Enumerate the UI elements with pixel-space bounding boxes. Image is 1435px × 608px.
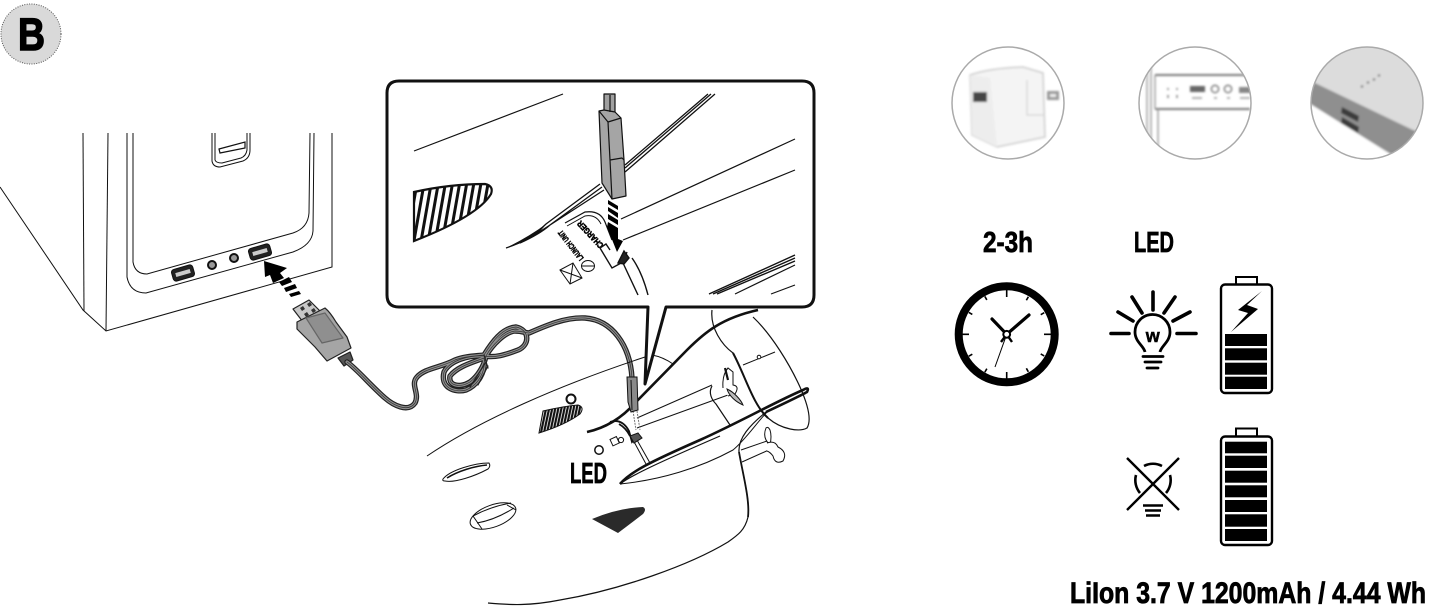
lower motor [741,427,785,462]
USB port right [248,243,272,261]
photo: computer front panel [1145,68,1250,146]
stern loop [712,310,809,430]
label: LED: LED [1134,227,1174,259]
hull charging connector and switch details [610,411,650,464]
arrow: plug into USB port [264,261,301,297]
inset charging port [600,244,648,295]
icon: lit bulb: w [1145,326,1161,346]
jack right [230,254,238,262]
icon: lit bulb [1111,292,1196,368]
cable connector on hull [627,377,638,412]
hull vent with hatch [539,405,582,433]
lower hull vent dark [592,507,645,533]
LED label on hull: LED [570,458,607,490]
step badge B: B [18,9,45,60]
USB port left [171,264,195,282]
inset connector [599,94,626,199]
photo ring power bank [1311,47,1423,159]
inset hatched vent [414,184,492,241]
icon: clock [959,286,1055,382]
step badge B [1,4,61,64]
photo: USB wall adapter [970,67,1059,147]
inset LAUNCH UNIT label: LAUNCH UNIT [556,228,586,262]
inset hull lines [414,94,795,294]
boat hull outline [427,310,809,605]
LED indicator ring [595,446,603,454]
label: 2-3h: 2-3h [983,227,1033,259]
photo: power bank [1312,48,1422,154]
icon: bulb off [1127,458,1179,516]
jack left [208,261,216,269]
inset wedge [506,224,546,248]
computer tower with USB ports [0,133,332,331]
icon: battery full [1221,428,1272,545]
hull top edge thick [587,310,758,432]
icon: battery charging [1221,277,1272,393]
ring above vent [566,394,576,404]
inset CHARGER label: CHARGER [575,219,605,250]
USB charging plug [293,300,353,366]
oval hatch lower [467,497,519,535]
upper motor [637,352,775,428]
photo ring adapter [952,47,1064,159]
inset arrow into port [607,200,623,252]
callout: zoomed charging port [387,81,814,384]
charging cable with coil [347,318,632,408]
callout bubble [387,81,814,384]
inset status symbols [560,260,594,284]
photo ring panel [1139,47,1251,159]
hull right deck thick [620,388,808,484]
oval hatch upper [443,463,490,481]
lower hull [488,412,766,605]
